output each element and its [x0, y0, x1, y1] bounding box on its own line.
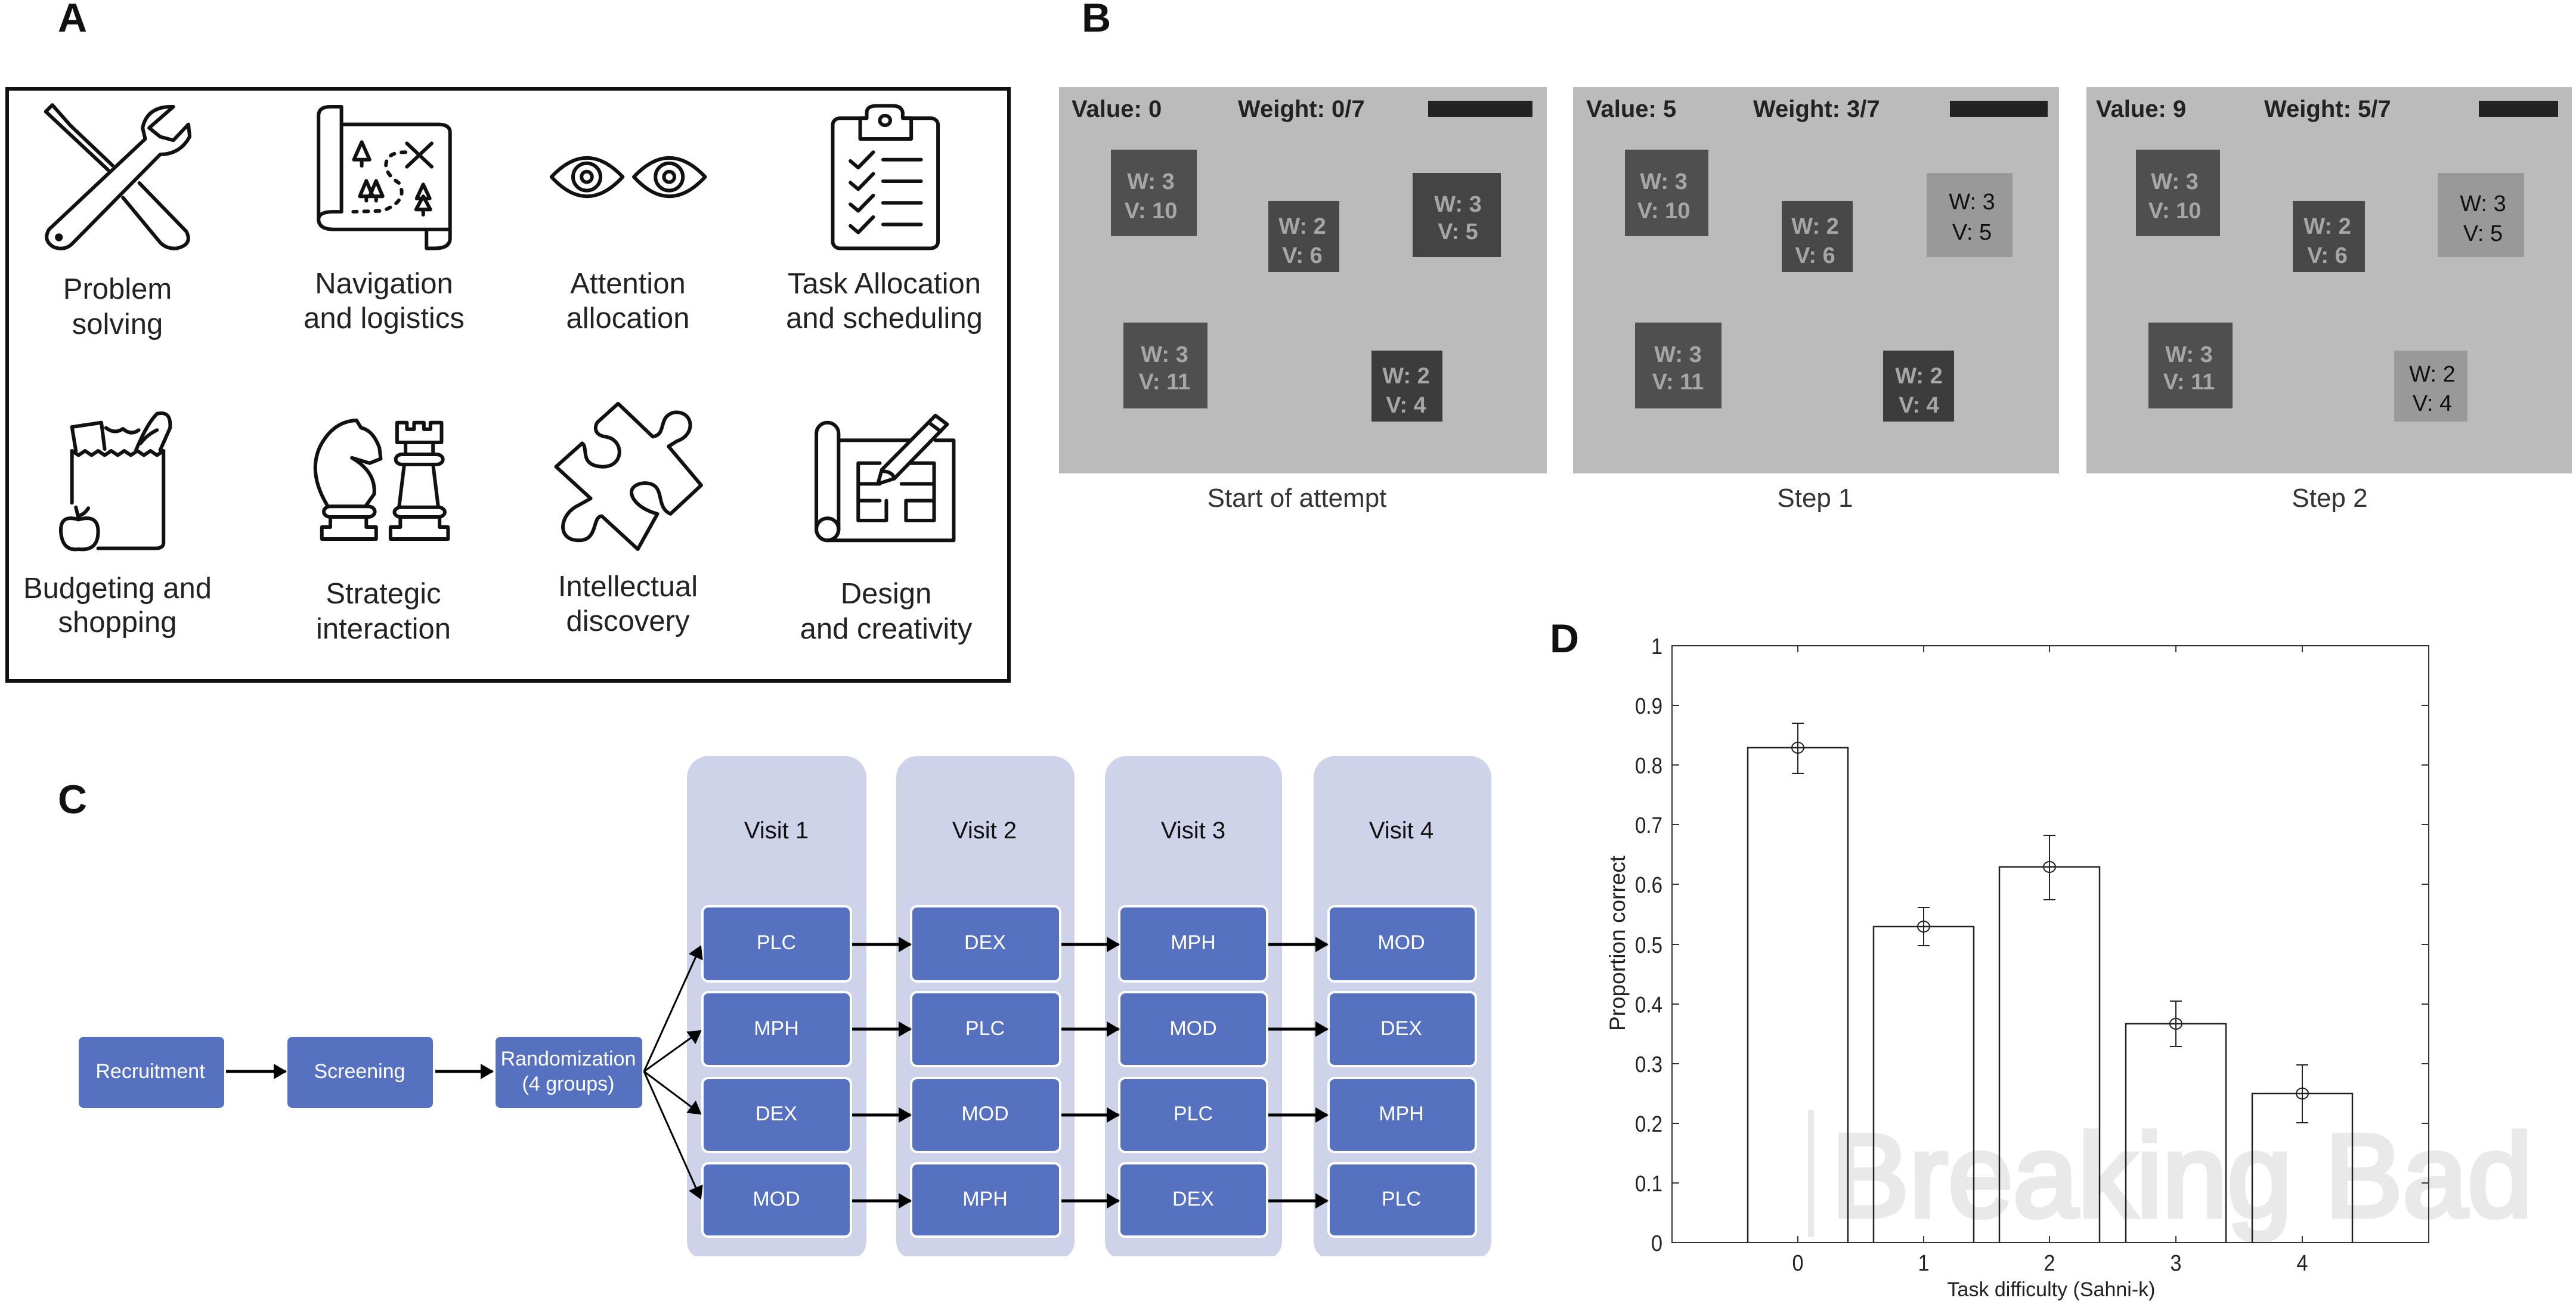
visit 3 column: Visit 3 [1161, 817, 1225, 844]
visit 1 column: MPH [754, 1017, 799, 1040]
item: W3 V5: V: 5 [1438, 219, 1478, 244]
item: W3 V10: V: 10 [1637, 199, 1690, 224]
y axis title: Proportion correct [1605, 855, 1630, 1031]
visit 3 column: MOD [1169, 1017, 1217, 1040]
item: W2 V6: W: 2 [2303, 214, 2351, 239]
visit 4 column: PLC [1382, 1188, 1421, 1210]
x tick labels: 2 [2044, 1251, 2055, 1276]
item: W3 V5 selected: W: 3 [1949, 190, 1995, 215]
icon: tools [46, 105, 190, 249]
item: W2 V4: V: 4 [1386, 393, 1426, 418]
visit 2 column: PLC [965, 1017, 1005, 1040]
item: W3 V10 [1625, 150, 1708, 236]
icon: puzzle piece [556, 404, 701, 549]
text: problem solving: Problem [63, 273, 172, 305]
visit 4 column: DEX [1380, 1017, 1422, 1040]
visit 2 column: MPH [962, 1188, 1008, 1210]
item: W3 V5 selected [2438, 173, 2524, 257]
item: W3 V11: W: 3 [1654, 342, 1702, 367]
y tick labels: 0.7 [1635, 813, 1662, 838]
item: W3 V11 [1635, 323, 1722, 408]
item: W3 V5 [1413, 173, 1501, 257]
item: W3 V10: W: 3 [1127, 169, 1175, 194]
text: problem solving: solving [72, 308, 163, 340]
panel B: start of attempt: Value: 0 [1072, 96, 1162, 122]
item: W2 V6: W: 2 [1278, 214, 1326, 239]
item: W2 V4 [1883, 351, 1954, 422]
y tick labels: 0.9 [1635, 694, 1662, 719]
visit 4 column [1314, 756, 1491, 1256]
item: W2 V6 [2293, 201, 2365, 272]
x tick labels: 1 [1918, 1251, 1930, 1276]
panel B: start of attempt: Weight: 0/7 [1238, 96, 1365, 122]
item: W2 V6 [1782, 201, 1853, 272]
item: W2 V4: V: 4 [1899, 393, 1939, 418]
visit 3 column: PLC [1174, 1102, 1213, 1125]
panel C: study flow [79, 756, 1491, 1256]
y tick labels: 1 [1651, 634, 1662, 659]
caption: step 2: Step 2 [2292, 484, 2368, 513]
y tick labels: 0.4 [1635, 993, 1662, 1018]
x tick labels: 3 [2171, 1251, 2181, 1276]
y tick labels: 0.1 [1635, 1172, 1662, 1197]
item: W2 V4: W: 2 [1895, 364, 1943, 389]
item: W2 V6: V: 6 [1795, 243, 1835, 268]
text: budgeting and shopping: shopping [58, 606, 177, 639]
icon: chess pieces [315, 420, 448, 539]
item: W2 V6 [1268, 201, 1339, 272]
visit 4 column: Visit 4 [1369, 817, 1433, 844]
text: attention allocation: allocation [566, 302, 690, 334]
item: W3 V10: W: 3 [2151, 169, 2199, 194]
item: W2 V4 selected [2394, 351, 2467, 422]
x axis title: Task difficulty (Sahni-k) [1948, 1278, 2155, 1301]
item: W3 V10: V: 10 [1125, 199, 1177, 224]
y tick labels: 0.5 [1635, 933, 1662, 958]
item: W2 V4: W: 2 [1382, 364, 1430, 389]
panel B: start of attempt [1059, 87, 1547, 473]
panel B: step 1 [1573, 87, 2059, 473]
visit 2 column: DEX [964, 931, 1006, 954]
item: W3 V11: V: 11 [2163, 370, 2215, 395]
icon: clipboard [832, 106, 938, 249]
panel B: step 1: Value: 5 [1586, 96, 1676, 122]
error bars [1792, 723, 2308, 1123]
text: budgeting and shopping: Budgeting and [23, 572, 212, 605]
icon: eyes [552, 158, 705, 196]
text: navigation and logistics: Navigation [315, 268, 453, 300]
label: panel C: C [58, 777, 87, 822]
visit 2 column: MOD [961, 1102, 1009, 1125]
item: W3 V10: V: 10 [2148, 199, 2201, 224]
arrows: flow [226, 944, 1327, 1201]
y tick labels: 0.8 [1635, 754, 1662, 779]
panel B: step 2: Value: 9 [2096, 96, 2186, 122]
item: W2 V4 selected: W: 2 [2409, 362, 2456, 387]
item: W3 V10 [1111, 150, 1197, 236]
text: design and creativity: Design [841, 578, 931, 610]
y tick labels: 0.6 [1635, 873, 1662, 898]
panel B: step 2 [2086, 87, 2572, 473]
panel A: task types [7, 89, 1009, 681]
item: W3 V10 [2136, 150, 2220, 236]
label: panel D: D [1550, 616, 1579, 661]
visit 3 column: DEX [1172, 1188, 1214, 1210]
item: W3 V5: W: 3 [1434, 192, 1482, 217]
box: screening: Screening [314, 1060, 405, 1083]
x tick labels: 4 [2297, 1251, 2308, 1276]
y tick labels: 0.3 [1635, 1052, 1662, 1077]
y tick labels: 0.2 [1635, 1112, 1662, 1137]
visit 2 column: Visit 2 [952, 817, 1017, 844]
caption: step 1: Step 1 [1777, 484, 1853, 513]
item: W3 V5 selected: V: 5 [1952, 220, 1992, 245]
item: W2 V6: V: 6 [1282, 243, 1323, 268]
text: navigation and logistics: and logistics [304, 302, 465, 334]
visit 4 column: MPH [1379, 1102, 1424, 1125]
icon: map [318, 107, 450, 249]
item: W2 V6: W: 2 [1791, 214, 1839, 239]
box: randomization [496, 1037, 642, 1108]
visit 3 column: MPH [1171, 931, 1216, 954]
item: W2 V4 [1371, 351, 1442, 422]
panel B: step 1: Weight: 3/7 [1753, 96, 1880, 122]
bars [1748, 748, 2352, 1243]
x tick labels [1792, 1251, 2308, 1276]
caption: start of attempt: Start of attempt [1208, 484, 1386, 513]
text: design and creativity: and creativity [800, 613, 973, 645]
item: W3 V11: V: 11 [1652, 370, 1704, 395]
icon: grocery bag [61, 413, 170, 549]
text: task allocation and scheduling: Task Allocation [788, 268, 981, 300]
item: W3 V11: W: 3 [2165, 342, 2213, 367]
box: recruitment [79, 1037, 224, 1108]
visit 1 column: DEX [756, 1102, 797, 1125]
item: W3 V5 selected: W: 3 [2460, 191, 2506, 216]
text: intellectual discovery: Intellectual [558, 571, 698, 603]
item: W2 V6: V: 6 [2307, 243, 2348, 268]
item: W3 V5 selected: V: 5 [2463, 221, 2503, 246]
box: randomization: Randomization [501, 1048, 636, 1070]
text: intellectual discovery: discovery [566, 605, 690, 637]
visit 2 column [896, 756, 1075, 1256]
text: attention allocation: Attention [570, 268, 686, 300]
item: W3 V11 [1123, 323, 1208, 408]
visit 4 column: MOD [1377, 931, 1425, 954]
panel B: step 2: Weight: 5/7 [2264, 96, 2391, 122]
box: randomization: (4 groups) [522, 1073, 614, 1095]
item: W3 V10: W: 3 [1640, 169, 1688, 194]
text: task allocation and scheduling: and scheduling [786, 302, 983, 334]
visit 3 column [1105, 756, 1282, 1256]
visit 1 column [687, 756, 866, 1256]
box: screening [287, 1037, 433, 1108]
visit 1 column: PLC [757, 931, 796, 954]
axes [1672, 646, 2429, 1243]
visit 1 column: MOD [753, 1188, 800, 1210]
text: strategic interaction: Strategic [326, 578, 441, 610]
icon: blueprint and pencil [816, 416, 953, 540]
text: strategic interaction: interaction [316, 613, 451, 645]
item: W2 V4 selected: V: 4 [2413, 391, 2452, 416]
y tick labels [1635, 634, 1662, 1256]
visit 1 column: Visit 1 [744, 817, 809, 844]
panel D: bar chart [1605, 634, 2532, 1301]
item: W3 V11: V: 11 [1139, 370, 1190, 395]
item: W3 V11: W: 3 [1141, 342, 1188, 367]
watermark: Breaking Bad [1831, 1110, 2532, 1241]
item: W3 V5 selected [1927, 173, 2012, 257]
item: W3 V11 [2148, 323, 2233, 408]
y tick labels: 0 [1651, 1231, 1662, 1256]
box: recruitment: Recruitment [95, 1060, 205, 1083]
x tick labels: 0 [1792, 1251, 1803, 1276]
